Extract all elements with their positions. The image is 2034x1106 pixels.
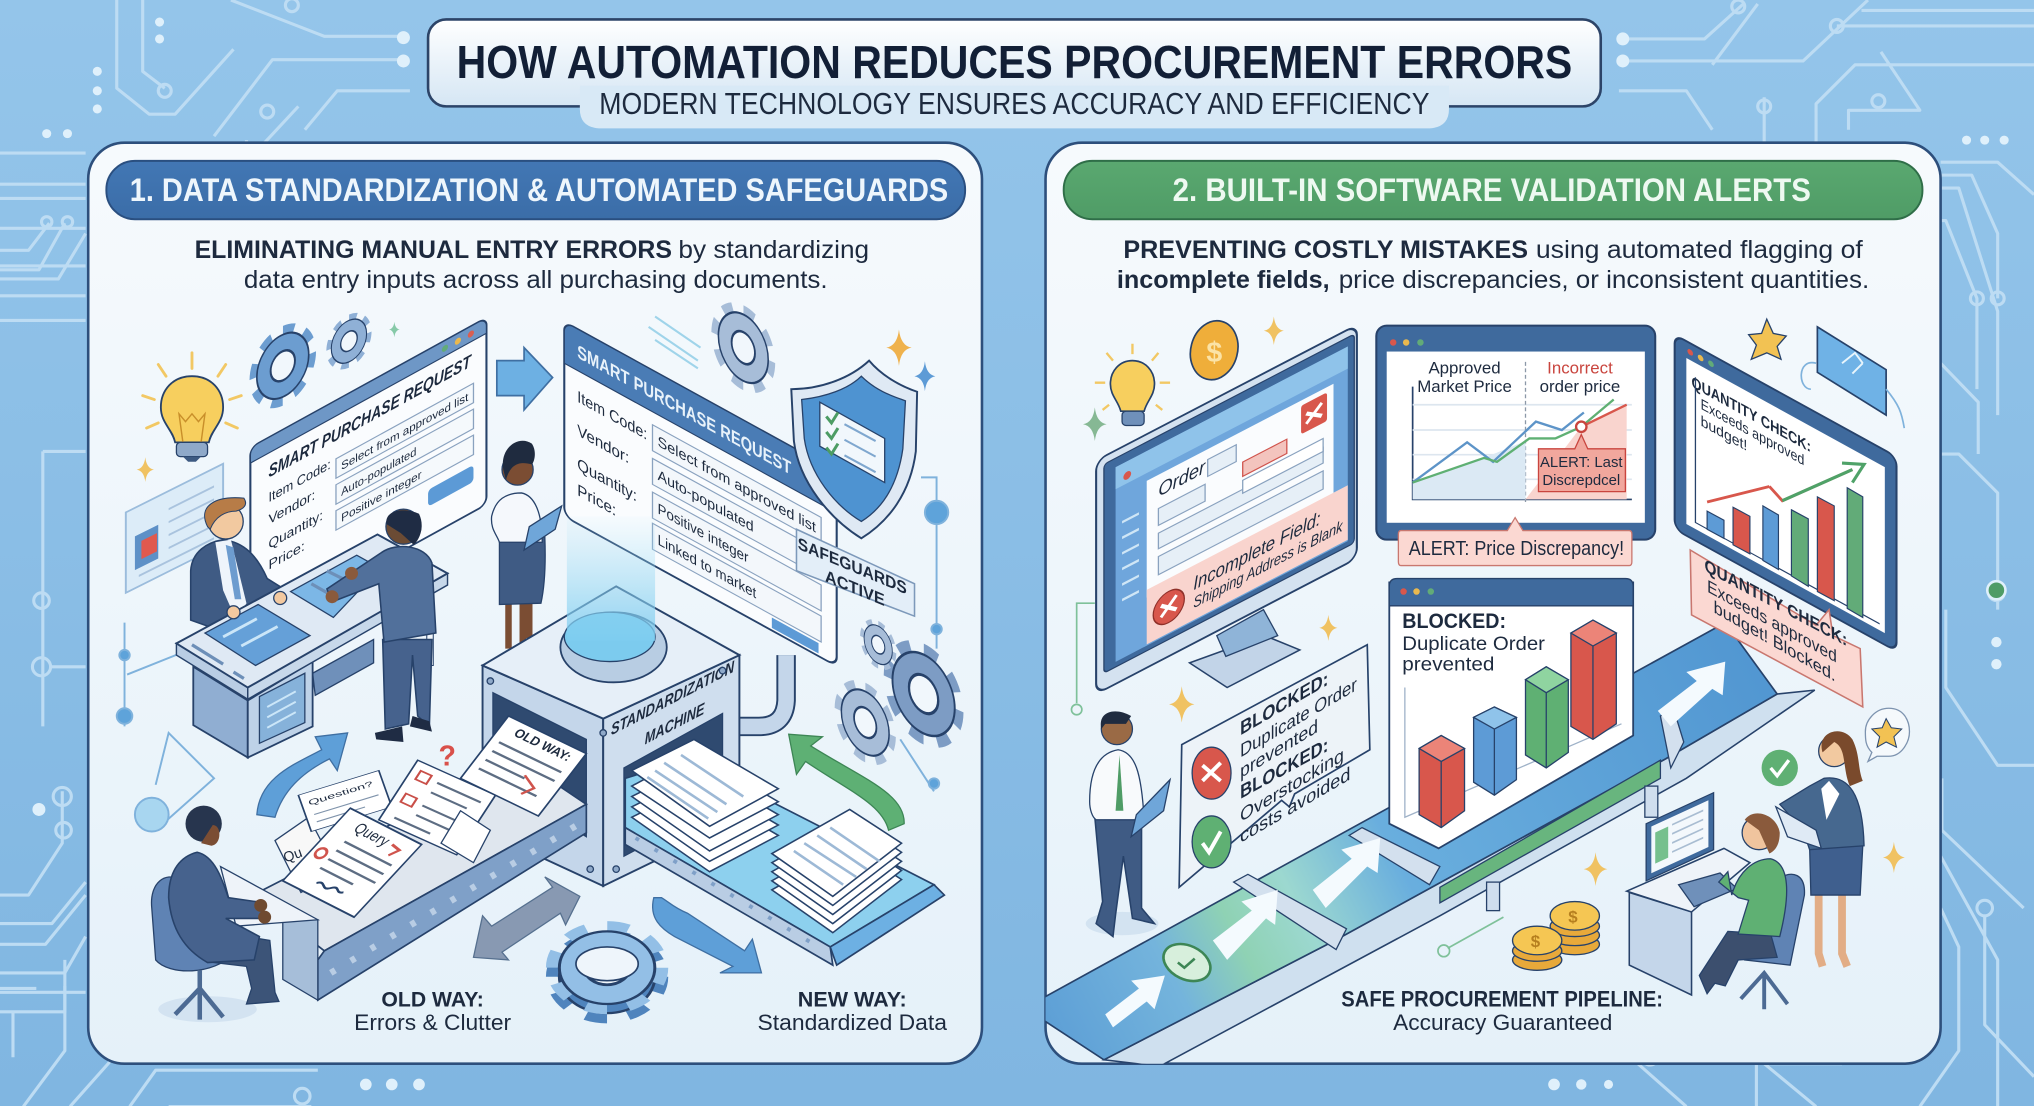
- belt arrows: [1105, 662, 1725, 1027]
- subtitle: MODERN TECHNOLOGY ENSURES ACCURACY AND EFFICIENCY: [599, 87, 1430, 121]
- title text: HOW AUTOMATION REDUCES PROCUREMENT ERRORS: [457, 36, 1572, 88]
- panel 1 intro text: [195, 236, 869, 294]
- form screen: smart purchase request (large): Positive integer: [658, 501, 749, 567]
- chart alert: ALERT: Last: [1540, 455, 1623, 471]
- person: man at console: [191, 498, 288, 633]
- coins: $: [1531, 932, 1541, 951]
- paper: question: [298, 771, 392, 832]
- callout: blocked list: Overstocking: [1240, 745, 1344, 827]
- form screen: smart purchase request (large): SMART PURCHASE REQUEST: [577, 342, 792, 480]
- panel 1 intro text: data entry inputs across all purchasing documents.: [244, 266, 828, 294]
- conveyor: new way: [625, 759, 944, 965]
- title banner: [428, 19, 1601, 128]
- papers: old way clutter: Qu: [281, 845, 305, 866]
- conveyor: safe procurement pipeline: [1025, 623, 1815, 1066]
- form screen: smart purchase request (small): Vendor:: [269, 488, 315, 528]
- panel 1 intro text: by standardizing: [678, 236, 869, 264]
- panel 2 intro text: [1117, 236, 1869, 294]
- person: manager with laptop: [1776, 731, 1864, 966]
- icon: gears top left: [254, 310, 400, 412]
- coins: $: [1568, 907, 1578, 926]
- desk: clerk: [221, 867, 318, 1000]
- arrow: blue standardized: [653, 898, 761, 973]
- window: blocked duplicate order: Duplicate Order: [1402, 633, 1546, 655]
- chart labels: Market Price: [1417, 377, 1512, 396]
- label: new way: Standardized Data: [758, 1010, 948, 1035]
- callout: blocked list: BLOCKED:: [1240, 668, 1328, 740]
- panel 2: validation alerts: [1025, 143, 1941, 1066]
- panel 1 heading: 1. DATA STANDARDIZATION & AUTOMATED SAFEGUARDS: [130, 172, 948, 208]
- chart labels: Incorrect: [1547, 359, 1613, 378]
- icon: lightbulb: [137, 353, 241, 482]
- trend line: [1707, 470, 1852, 502]
- machine lens: [560, 612, 667, 682]
- question mark: ?: [438, 740, 456, 772]
- light beam: [567, 516, 655, 641]
- quantity check callout: budget! Blocked.: [1714, 597, 1836, 686]
- standardization machine: MACHINE: [645, 698, 705, 748]
- form screen: smart purchase request (large): Linked to market: [658, 532, 757, 603]
- icon: lightbulb and coin: [1083, 315, 1284, 441]
- paper: scrap: [275, 817, 337, 892]
- panel 1 intro text: ELIMINATING MANUAL ENTRY ERRORS: [195, 236, 672, 264]
- form screen: smart purchase request (small): Item Code:: [269, 457, 331, 506]
- form screen: smart purchase request (small): Auto-populated: [341, 444, 417, 499]
- monitor stand: [1190, 610, 1300, 688]
- panel 2 heading: 2. BUILT-IN SOFTWARE VALIDATION ALERTS: [1173, 172, 1811, 208]
- window: blocked duplicate order: prevented: [1402, 654, 1494, 676]
- callout: blocked list: costs avoided: [1240, 764, 1350, 848]
- 3d bar chart: [1405, 620, 1621, 828]
- chart window: price discrepancy: [1376, 326, 1655, 566]
- paper stack: standardized 1: [632, 739, 778, 872]
- paper: question: Question?: [307, 779, 374, 807]
- quantity check callout: QUANTITY CHECK:: [1705, 555, 1847, 650]
- price discrepancy callout: [1398, 518, 1632, 566]
- paper: small red: [441, 811, 490, 863]
- arrow: double grey: [473, 877, 580, 960]
- arrow: blue curved: [257, 733, 348, 817]
- tag: safeguards active: ACTIVE: [825, 566, 885, 610]
- form screen: smart purchase request (small): [250, 318, 486, 634]
- panel 2 intro text: price discrepancies, or inconsistent quantities.: [1339, 266, 1869, 294]
- form screen: smart purchase request (large): Quantity:: [577, 454, 637, 505]
- monitor: quantity check: [1675, 335, 1896, 651]
- person: man operating console: [326, 509, 436, 742]
- machine label: STANDARDIZATION: [611, 656, 735, 739]
- form screen: smart purchase request (small): Quantity:: [269, 508, 323, 553]
- label: safe procurement pipeline: [1341, 987, 1663, 1035]
- green check badge: [1192, 816, 1231, 868]
- window: blocked duplicate order: BLOCKED:: [1402, 609, 1506, 633]
- coin: [1184, 315, 1244, 385]
- icon: green check: [1762, 750, 1798, 786]
- circuit line nodes: [1071, 603, 1503, 957]
- paper: old way: OLD WAY:: [511, 725, 575, 764]
- bar chart: [1707, 488, 1863, 617]
- arrow: screen to screen: [497, 348, 553, 410]
- quantity check callout: [1690, 550, 1863, 707]
- monitor: quantity check: Exceeds approved: [1701, 397, 1804, 469]
- form screen: smart purchase request (large): Price:: [577, 480, 616, 520]
- line chart: [1413, 362, 1632, 503]
- paper: old way: [461, 716, 586, 816]
- icon: big gear: [555, 928, 659, 1017]
- price discrepancy callout: ALERT: Price Discrepancy!: [1409, 538, 1624, 560]
- label: old way: Errors & Clutter: [354, 1010, 511, 1035]
- star speech bubble: [1865, 708, 1909, 761]
- paper: checklist: [379, 760, 496, 855]
- label: old way: [354, 988, 511, 1035]
- paper: query: Query: [349, 820, 394, 850]
- monitor: quantity check: QUANTITY CHECK:: [1692, 373, 1811, 456]
- form screen: smart purchase request (small): Select from approved list: [341, 390, 469, 473]
- person: seated clerk: [152, 806, 279, 1022]
- label: old way: OLD WAY:: [381, 988, 484, 1012]
- chart labels: Approved: [1428, 359, 1501, 378]
- quantity check callout: Exceeds approved: [1707, 576, 1837, 667]
- monitor: order form: Shipping Address is Blank: [1193, 516, 1343, 612]
- tag: safeguards active: SAFEGUARDS: [798, 533, 907, 598]
- callout: blocked list: Duplicate Order: [1240, 674, 1357, 762]
- paper stack: standardized 2: [772, 809, 902, 933]
- icon: gear top center: [716, 298, 771, 397]
- window: blocked duplicate order: [1389, 579, 1633, 848]
- belt check badge: [1162, 942, 1212, 982]
- panel 1: data standardization: [88, 143, 982, 1064]
- circuit decoration node: [117, 477, 948, 832]
- pipe from machine to screen: [733, 655, 786, 726]
- decorative data lines: [649, 317, 700, 368]
- conveyor: old way: [253, 759, 586, 1000]
- red x badge: [1192, 747, 1231, 799]
- person: analyst with tablet: [1086, 711, 1170, 937]
- form screen: smart purchase request (large): Auto-populated: [658, 467, 754, 536]
- form screen: smart purchase request (large): Item Code:: [577, 387, 647, 444]
- panel 1 heading: [106, 161, 965, 219]
- monitor: quantity check: budget!: [1701, 413, 1747, 455]
- icon: lightbulb and coin: $: [1206, 337, 1222, 369]
- callout: blocked list: [1179, 645, 1370, 887]
- chart alert: Discrepdcel: [1542, 473, 1620, 489]
- form screen: smart purchase request (small): Positive integer: [341, 468, 422, 525]
- small document panel: [126, 464, 223, 593]
- form screen: smart purchase request (small): Price:: [269, 539, 305, 574]
- chart labels: order price: [1540, 377, 1620, 396]
- person: seated worker: [1699, 813, 1804, 1009]
- monitor: order form: Incomplete Field:: [1193, 508, 1321, 595]
- label: new way: NEW WAY:: [798, 988, 907, 1012]
- panel 2 heading: [1064, 161, 1922, 219]
- chart alert: [1538, 435, 1625, 492]
- form screen: smart purchase request (large): Vendor:: [577, 420, 629, 467]
- workstation desk: [1627, 793, 1750, 995]
- coins: [1513, 902, 1599, 970]
- label: new way: [758, 988, 948, 1035]
- form screen: smart purchase request (small): SMART PURCHASE REQUEST: [269, 350, 472, 481]
- control console: [176, 534, 448, 758]
- panel 2 intro text: using automated flagging of: [1536, 236, 1864, 264]
- form screen: smart purchase request (large): Select from approved list: [658, 434, 816, 537]
- panel 2 intro text: incomplete fields,: [1117, 266, 1330, 294]
- monitor: order form: [1096, 325, 1357, 694]
- form screen: smart purchase request (large): [564, 322, 837, 666]
- callout: blocked list: prevented: [1240, 716, 1318, 783]
- chart labels: [1417, 359, 1620, 396]
- icon: shield: [791, 329, 935, 538]
- label: safe procurement pipeline: Accuracy Guaranteed: [1393, 1010, 1612, 1035]
- panel 2 intro text: PREVENTING COSTLY MISTAKES: [1123, 236, 1528, 264]
- standardization machine: [483, 516, 739, 886]
- monitor: order form: Order: [1158, 456, 1206, 502]
- arrow: green return: [789, 734, 904, 830]
- console touch screens: [192, 555, 380, 678]
- sparkles: [1169, 615, 1905, 886]
- label: safe procurement pipeline: SAFE PROCUREMENT PIPELINE:: [1341, 987, 1663, 1012]
- gears right: [839, 617, 958, 769]
- person: woman with tablet: [491, 441, 562, 649]
- icon: star and network tile: [1749, 319, 1904, 428]
- papers: old way clutter: [275, 716, 586, 917]
- paper: query: [283, 808, 422, 917]
- callout: blocked list: BLOCKED:: [1240, 734, 1328, 804]
